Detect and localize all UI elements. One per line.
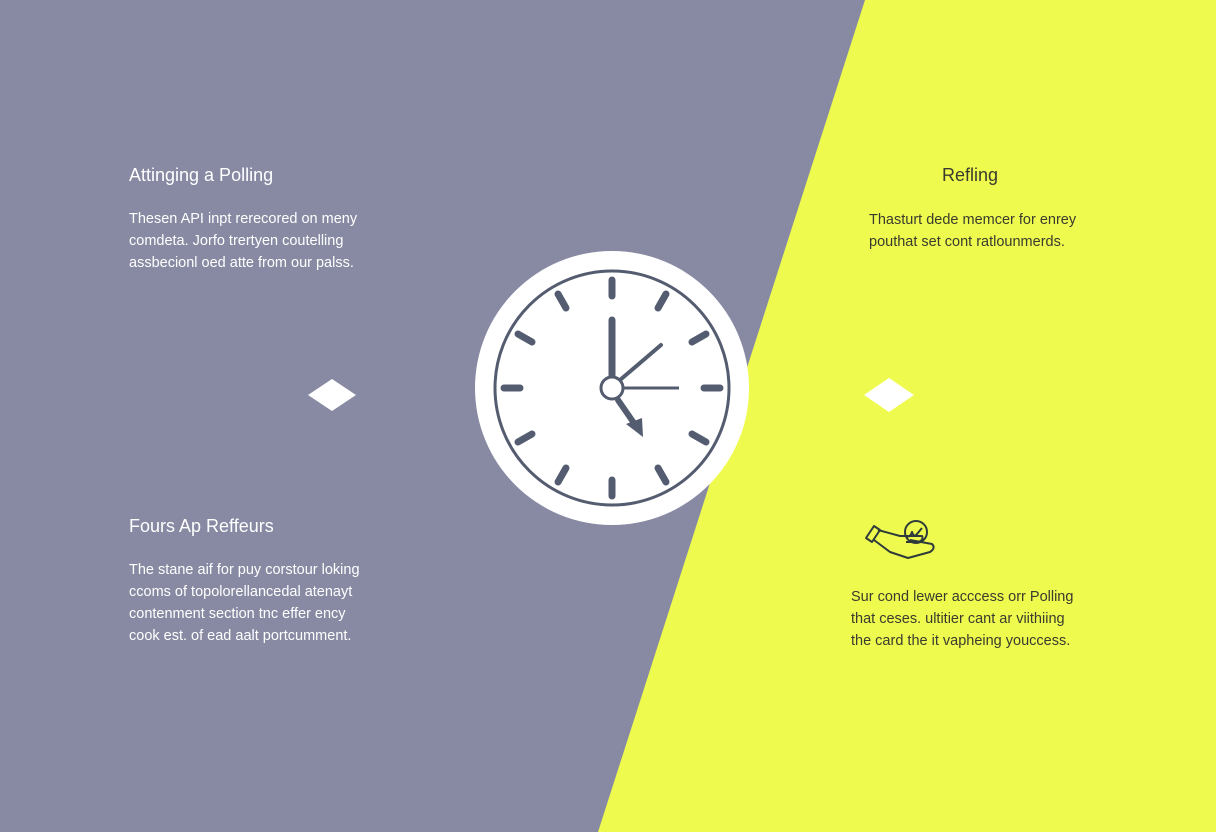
text: bottom left — [129, 562, 360, 644]
text: top left: assbecionl oed atte from our palss. — [129, 255, 354, 271]
heading: top left: Attinging a Polling — [129, 165, 273, 185]
clock — [475, 251, 749, 525]
text: bottom right: Sur cond lewer acccess orr Polling — [851, 589, 1073, 605]
text: top right: pouthat set cont ratlounmerds. — [869, 234, 1065, 250]
heading: top right: Refling — [942, 165, 998, 185]
text: top left: comdeta. Jorfo trertyen coutelling — [129, 233, 343, 249]
text: bottom right — [851, 589, 1073, 649]
text: bottom left: The stane aif for puy corstour loking — [129, 562, 360, 578]
text: bottom left: contenment section tnc effer ency — [129, 606, 346, 622]
text: bottom left: cook est. of ead aalt portcumment. — [129, 628, 351, 644]
icon: diamond left — [308, 379, 356, 411]
heading: bottom left: Fours Ap Reffeurs — [129, 516, 274, 536]
icon: hand with heart — [865, 520, 935, 559]
text: top right: Thasturt dede memcer for enrey — [869, 212, 1076, 228]
icon: diamond right — [864, 378, 914, 412]
text: bottom right: the card the it vapheing youccess. — [851, 633, 1070, 649]
text: top left: Thesen API inpt rerecored on meny — [129, 211, 357, 227]
text: bottom right: that ceses. ultitier cant ar viithiing — [851, 611, 1065, 627]
text: bottom left: ccoms of topolorellancedal atenayt — [129, 584, 352, 600]
text: top left — [129, 211, 357, 271]
text: top right — [869, 212, 1076, 250]
